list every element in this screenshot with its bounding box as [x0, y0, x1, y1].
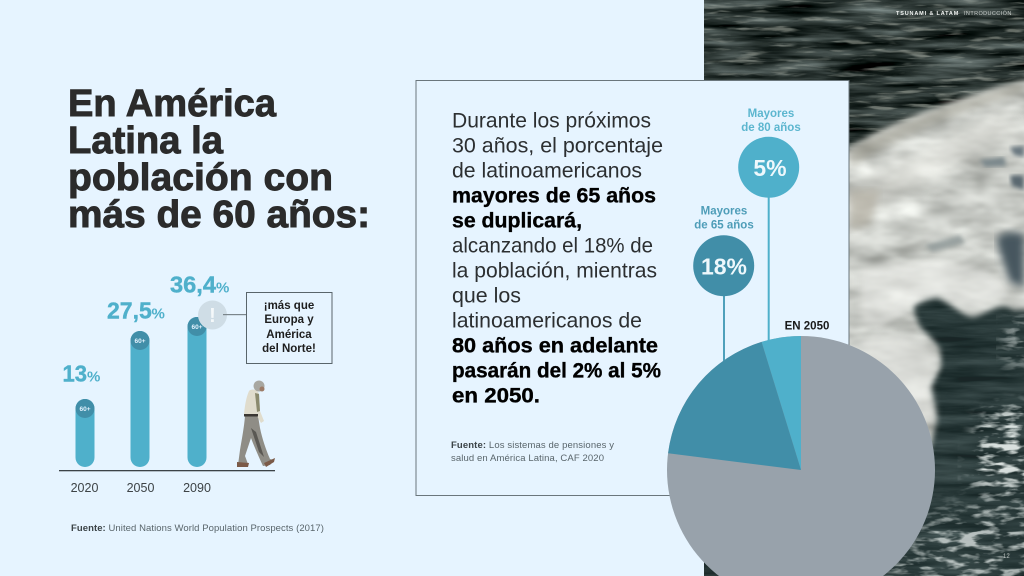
callout: ¡más que: [264, 300, 314, 312]
title: más de 60 años:: [68, 194, 370, 236]
callout: over 65: [693, 206, 754, 380]
header breadcrumb: ·: [958, 11, 960, 17]
icon: exclamation badge: [198, 300, 227, 330]
bar 2090: [170, 272, 229, 495]
source: panel: [451, 440, 614, 464]
title: Latina la: [68, 120, 224, 162]
callout: over 65: 18%: [701, 254, 747, 280]
body text: la población, mientras: [452, 260, 657, 282]
title: En América: [68, 83, 277, 125]
callout: over 65: de 65 años: [694, 220, 754, 232]
body text: latinoamericanos de: [452, 310, 642, 332]
pie chart heading: EN 2050: [785, 320, 829, 332]
source: panel: Fuente: Los sistemas de pensiones y: [451, 440, 614, 451]
callout: over 80: [738, 108, 801, 360]
bar 2090: 60+: [191, 324, 203, 331]
panel: main text box: [416, 80, 849, 496]
icon: exclamation badge: !: [209, 305, 216, 327]
callout: over 80: Mayores: [748, 108, 794, 120]
body text: de latinoamericanos: [452, 160, 642, 182]
bar chart: population over 60: [59, 272, 275, 495]
body text: 80 años en adelante: [452, 334, 658, 358]
body text: pasarán del 2% al 5%: [452, 360, 661, 382]
bar 2050: [107, 297, 165, 495]
callout: América: [266, 329, 312, 341]
header breadcrumb: [896, 10, 1012, 17]
bar 2050: 60+: [134, 338, 146, 345]
bar 2090: 2090: [183, 481, 211, 495]
bar 2020: [62, 361, 100, 495]
bar 2020: 13: [62, 361, 87, 387]
source: panel: salud en América Latina, CAF 2020: [451, 453, 604, 464]
body text: Durante los próximos: [452, 110, 651, 132]
pie chart: age share in 2050: [667, 336, 935, 576]
bar 2050: 27,5: [107, 297, 152, 323]
source: left: Fuente: United Nations World Population Prospects (2017): [71, 523, 324, 534]
callout: Europa y: [264, 314, 314, 326]
body text: se duplicará,: [452, 210, 582, 232]
icon: elderly man walking: [237, 380, 275, 467]
title: [68, 83, 370, 236]
callout: over 65: Mayores: [701, 206, 747, 218]
body text: en 2050.: [452, 384, 540, 408]
header breadcrumb: INTRODUCCIÓN: [964, 10, 1012, 17]
page number: 12: [1003, 554, 1010, 560]
callout: del Norte!: [262, 343, 316, 355]
connector arrow: [223, 314, 250, 315]
bar 2090: 36,4: [170, 272, 216, 298]
bar 2020: 2020: [71, 481, 98, 495]
photo: ocean wave: [704, 0, 1024, 576]
axis: [59, 470, 275, 471]
title: población con: [68, 157, 333, 199]
body text: mayores de 65 años: [452, 184, 656, 208]
header breadcrumb: TSUNAMI & LATAM: [896, 11, 959, 17]
callout: over 80: 5%: [753, 155, 787, 181]
bar 2090: %: [216, 280, 229, 297]
bar 2050: %: [152, 305, 165, 322]
bar 2020: %: [87, 369, 100, 386]
bar 2050: 2050: [127, 481, 154, 495]
body text: que los: [452, 284, 521, 308]
body text: [452, 110, 663, 408]
bar 2020: 60+: [79, 406, 91, 413]
body text: 30 años, el porcentaje: [452, 134, 663, 158]
body text: alcanzando el 18% de: [452, 234, 653, 258]
callout: over 80: de 80 años: [741, 122, 801, 134]
callout: [246, 292, 332, 364]
